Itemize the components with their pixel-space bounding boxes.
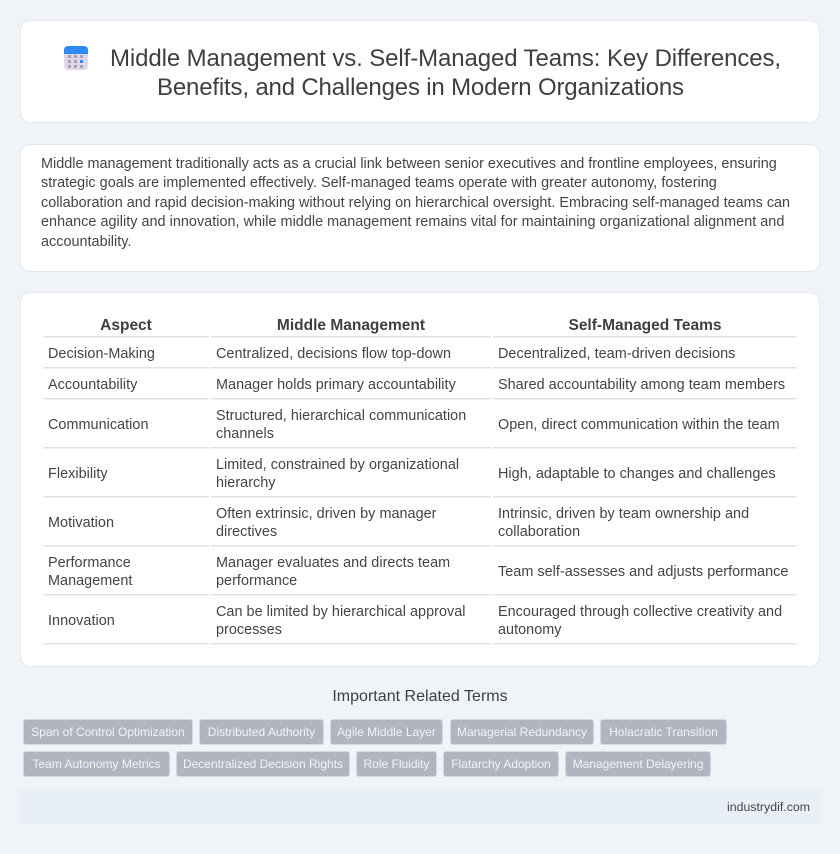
panel: title header: [20, 20, 820, 123]
row: Performance Management: performance: [216, 573, 297, 589]
row: Communication: [43, 408, 797, 449]
row: Performance Management: Team self-assesses and adjusts performance: [498, 564, 788, 580]
tag: Holacratic Transition: [609, 725, 718, 739]
row: Innovation: Encouraged through collective creativity and: [498, 604, 782, 620]
tag: Team Autonomy Metrics: [32, 757, 161, 771]
heading: related terms: Important Related Terms: [332, 688, 508, 705]
row: Decision-Making: Decision-Making: [48, 346, 155, 362]
tag: [565, 751, 711, 777]
row: Motivation: [43, 506, 797, 547]
row: Performance Management: Manager evaluates and directs team: [216, 555, 450, 571]
row: Flexibility: Limited, constrained by organizational: [216, 457, 459, 473]
text block: introduction: strategic goals are implemented effectively. Self-managed teams operate with greater autonomy, fostering: [41, 175, 717, 191]
title: Benefits, and Challenges in Modern Organizations: [157, 74, 684, 101]
row: Flexibility: hierarchy: [216, 475, 276, 491]
row: Accountability: Accountability: [48, 377, 137, 393]
tag: [330, 719, 443, 745]
row: Innovation: autonomy: [498, 622, 562, 638]
row: Motivation: Intrinsic, driven by team ownership and: [498, 506, 749, 522]
panel: introduction: [20, 144, 820, 272]
text block: introduction: enhance agility and innovation, while middle management remains vital for maintaining organizational alignment and: [41, 214, 784, 230]
row: Innovation: Can be limited by hierarchical approval: [216, 604, 466, 620]
row: Innovation: processes: [216, 622, 282, 638]
table header: [43, 317, 797, 338]
tag: Management Delayering: [573, 757, 703, 771]
tag: Distributed Authority: [208, 725, 315, 739]
row: Motivation: Motivation: [48, 515, 114, 531]
tag: Span of Control Optimization: [31, 725, 185, 739]
footer: [20, 790, 820, 824]
tag: [23, 751, 170, 777]
row: Performance Management: [43, 555, 797, 596]
tag: Agile Middle Layer: [337, 725, 436, 739]
row: Motivation: Often extrinsic, driven by manager: [216, 506, 437, 522]
icon: calendar: [64, 46, 88, 70]
row: Communication: Open, direct communication within the team: [498, 417, 780, 433]
row: Decision-Making: Centralized, decisions flow top-down: [216, 346, 451, 362]
footer text: industrydif.com: [727, 800, 810, 814]
text block: introduction: accountability.: [41, 234, 131, 250]
tag: [450, 719, 594, 745]
tag: [176, 751, 350, 777]
table header: Middle Management: [277, 317, 425, 334]
panel: comparison table: [20, 292, 820, 667]
row: Accountability: Manager holds primary accountability: [216, 377, 456, 393]
row: Decision-Making: [43, 346, 797, 369]
tag: [600, 719, 727, 745]
row: Communication: channels: [216, 426, 274, 442]
text block: introduction: collaboration and rapid decision-making without relying on hierarchical oversight. Embracing self-managed teams can: [41, 195, 790, 211]
tag: [199, 719, 324, 745]
tag: Managerial Redundancy: [457, 725, 587, 739]
text block: introduction: Middle management traditionally acts as a crucial link between senior executives and frontline employees, ensuring: [41, 156, 777, 172]
title: [110, 45, 781, 101]
row: Innovation: [43, 604, 797, 645]
row: Accountability: [43, 377, 797, 400]
row: Flexibility: Flexibility: [48, 466, 108, 482]
row: Motivation: collaboration: [498, 524, 580, 540]
table header: Self-Managed Teams: [568, 317, 722, 334]
comparison table: [43, 317, 797, 645]
row: Communication: Structured, hierarchical communication: [216, 408, 466, 424]
row: Motivation: directives: [216, 524, 277, 540]
tag: Decentralized Decision Rights: [183, 757, 343, 771]
tag: Role Fluidity: [363, 757, 430, 771]
tag: [23, 719, 193, 745]
tag: [356, 751, 437, 777]
row: Performance Management: Performance: [48, 555, 131, 571]
row: Flexibility: High, adaptable to changes and challenges: [498, 466, 776, 482]
row: Flexibility: [43, 457, 797, 498]
title: Middle Management vs. Self-Managed Teams: Key Differences,: [110, 45, 781, 72]
row: Communication: Communication: [48, 417, 148, 433]
table header: Aspect: [100, 317, 152, 334]
tags: related terms: [23, 719, 727, 777]
row: Innovation: Innovation: [48, 613, 115, 629]
row: Performance Management: Management: [48, 573, 132, 589]
text block: introduction: [41, 156, 790, 250]
row: Decision-Making: Decentralized, team-driven decisions: [498, 346, 735, 362]
tag: Flatarchy Adoption: [451, 757, 551, 771]
tag: [443, 751, 559, 777]
row: Accountability: Shared accountability among team members: [498, 377, 785, 393]
